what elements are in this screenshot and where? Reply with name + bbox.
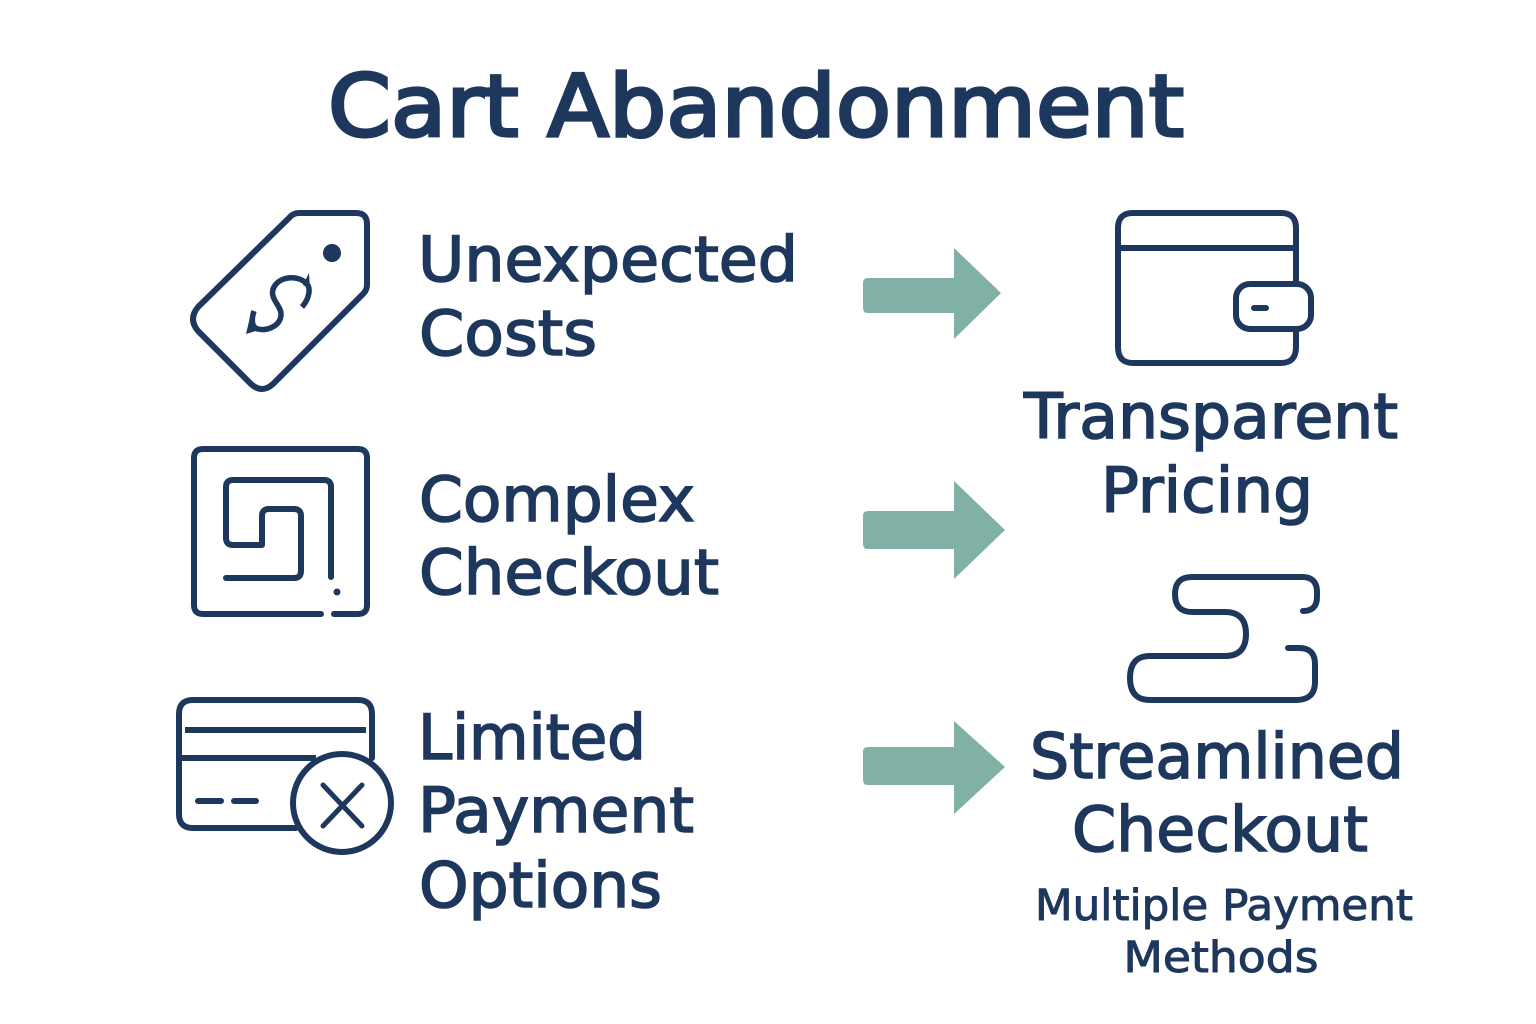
icon: price tag <box>193 213 367 389</box>
arrow 2 <box>863 481 1005 579</box>
icon: maze <box>194 449 367 614</box>
label: streamlined checkout: Streamlined <box>1030 720 1404 793</box>
icon: streamlined path <box>1130 577 1317 700</box>
label: transparent pricing: Pricing <box>1101 454 1313 527</box>
label: multiple payment methods: Methods <box>1124 933 1318 983</box>
label: transparent pricing <box>1023 380 1398 527</box>
label: unexpected costs: Unexpected <box>418 223 798 296</box>
label: streamlined checkout: Checkout <box>1072 793 1368 866</box>
icon: credit card with x <box>179 700 391 852</box>
label: limited payment options <box>418 701 694 922</box>
label: limited payment options: Limited <box>418 701 646 774</box>
arrow 3 <box>863 721 1005 814</box>
label: limited payment options: Payment <box>418 774 694 847</box>
label: unexpected costs <box>418 223 798 370</box>
label: multiple payment methods: Multiple Payment <box>1035 881 1413 931</box>
label: unexpected costs: Costs <box>419 297 597 370</box>
label: multiple payment methods <box>1035 881 1413 983</box>
icon: wallet <box>1118 213 1311 363</box>
label: complex checkout: Checkout <box>419 536 719 609</box>
arrow 1 <box>863 248 1001 339</box>
label: complex checkout <box>419 463 719 609</box>
label: limited payment options: Options <box>419 849 662 922</box>
label: transparent pricing: Transparent <box>1023 380 1398 453</box>
label: complex checkout: Complex <box>419 463 695 536</box>
title: Cart Abandonment <box>328 57 1184 157</box>
label: streamlined checkout <box>1030 720 1404 866</box>
